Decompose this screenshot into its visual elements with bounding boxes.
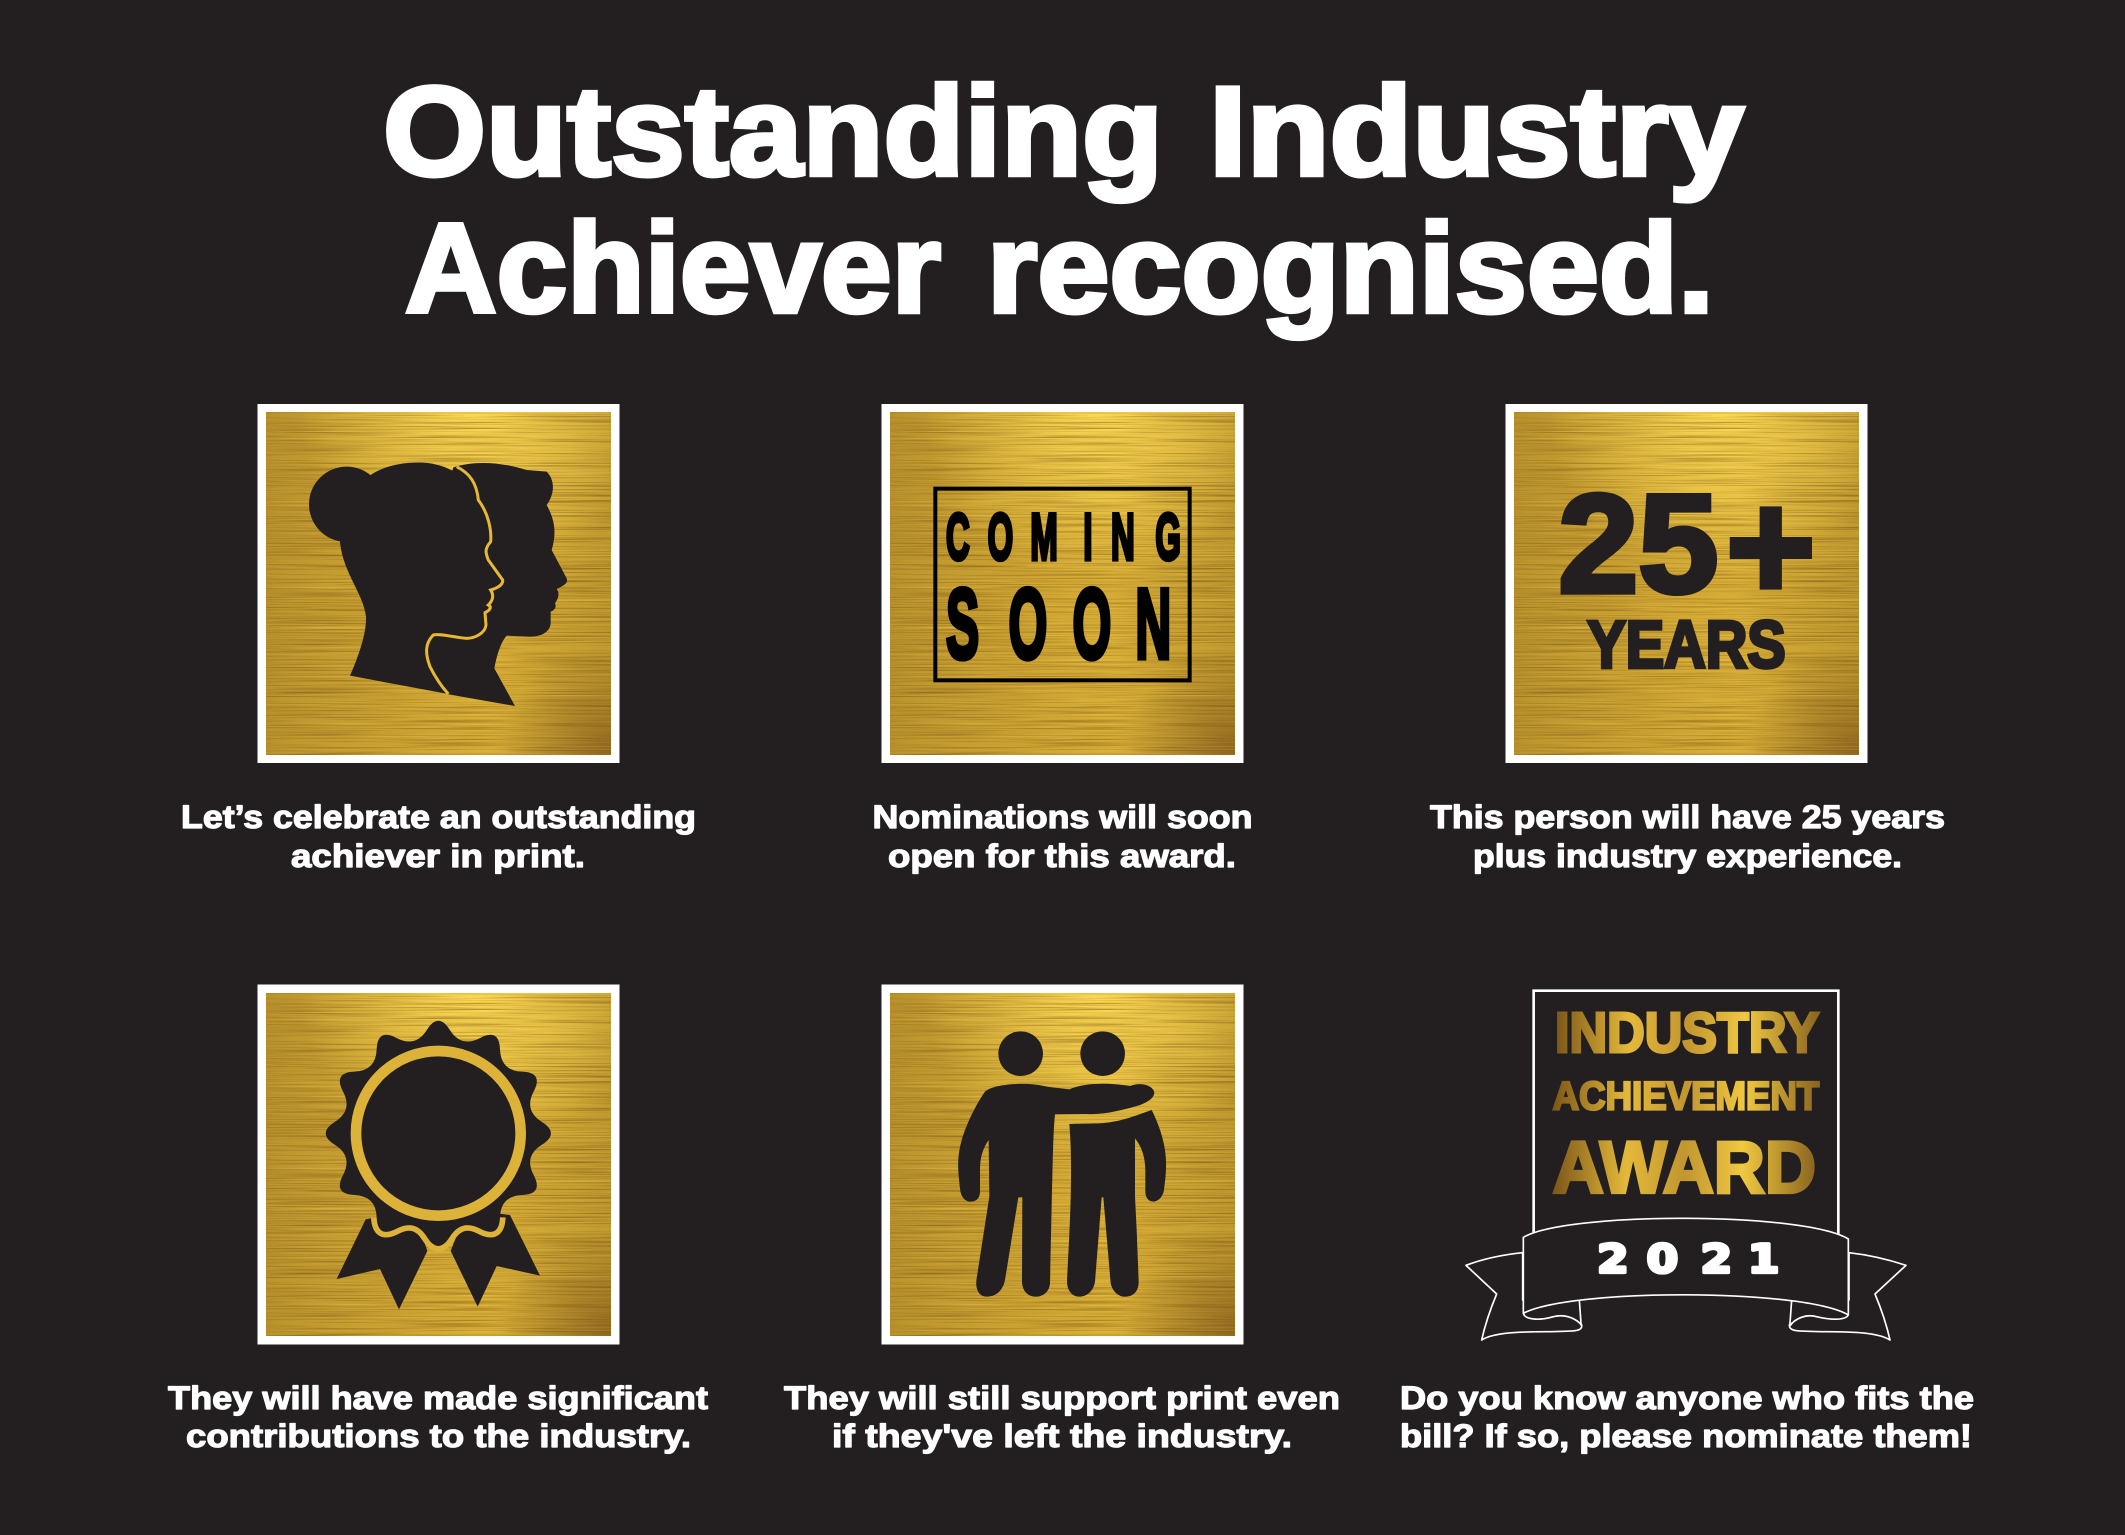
- caption: 25 years: [1430, 799, 1945, 874]
- panel: two people: [882, 984, 1244, 1344]
- caption: celebrate: achiever in print.: [291, 838, 585, 874]
- icon: 25+ years: +: [1726, 461, 1816, 632]
- award name text: AWARD: [1553, 1127, 1816, 1209]
- caption: support print: [784, 1380, 1340, 1454]
- caption: support print: if they've left the industry.: [832, 1418, 1292, 1454]
- title: Industry: [1209, 60, 1744, 202]
- icon: 25+ years: 25: [1558, 465, 1718, 622]
- award name text: INDUSTRY: [1555, 1002, 1819, 1065]
- award name text: ACHIEVEMENT: [1553, 1075, 1819, 1119]
- icon: coming soon stamp: SOON: [946, 568, 1171, 680]
- caption: nominate: Do you know anyone who fits the: [1400, 1380, 1974, 1416]
- caption: nominate: bill? If so, please nominate them!: [1400, 1418, 1972, 1454]
- icon: coming soon stamp: [935, 489, 1190, 680]
- caption: 25 years: This person will have 25 years: [1430, 799, 1945, 835]
- icon: 25+ years: [1558, 461, 1816, 682]
- title: [383, 60, 1744, 339]
- title: Outstanding: [383, 60, 1163, 202]
- year: 2021: [1597, 1236, 1779, 1282]
- caption: celebrate: [181, 799, 696, 874]
- title: Achiever: [405, 197, 941, 339]
- panel: rosette award: [258, 984, 620, 1344]
- icon: man and woman silhouettes: [309, 462, 567, 706]
- panel: two profile heads: [258, 404, 620, 763]
- title: recognised.: [987, 197, 1714, 339]
- caption: 25 years: plus industry experience.: [1473, 838, 1902, 874]
- award name text: [1553, 1002, 1819, 1209]
- caption: celebrate: Let’s celebrate an outstanding: [181, 799, 696, 835]
- panel: 25+ years: [1506, 404, 1868, 763]
- icon: coming soon stamp: COMING: [946, 501, 1181, 575]
- icon: 25+ years: YEARS: [1587, 608, 1786, 682]
- icon: two people with arm around shoulder: [958, 1031, 1166, 1297]
- caption: nominations: [872, 799, 1252, 874]
- caption: nominate: [1400, 1380, 1974, 1454]
- caption: contributions: contributions to the industry.: [186, 1418, 691, 1454]
- caption: support print: They will still support print even: [784, 1380, 1340, 1416]
- caption: nominations: open for this award.: [888, 838, 1236, 874]
- caption: nominations: Nominations will soon: [872, 799, 1252, 835]
- panel: coming soon: [882, 404, 1244, 763]
- panel: award badge: [1466, 991, 1906, 1340]
- icon: rosette: [326, 1021, 551, 1309]
- caption: contributions: They will have made significant: [168, 1380, 708, 1416]
- caption: contributions: [168, 1380, 708, 1454]
- ribbon banner: [1466, 1218, 1906, 1340]
